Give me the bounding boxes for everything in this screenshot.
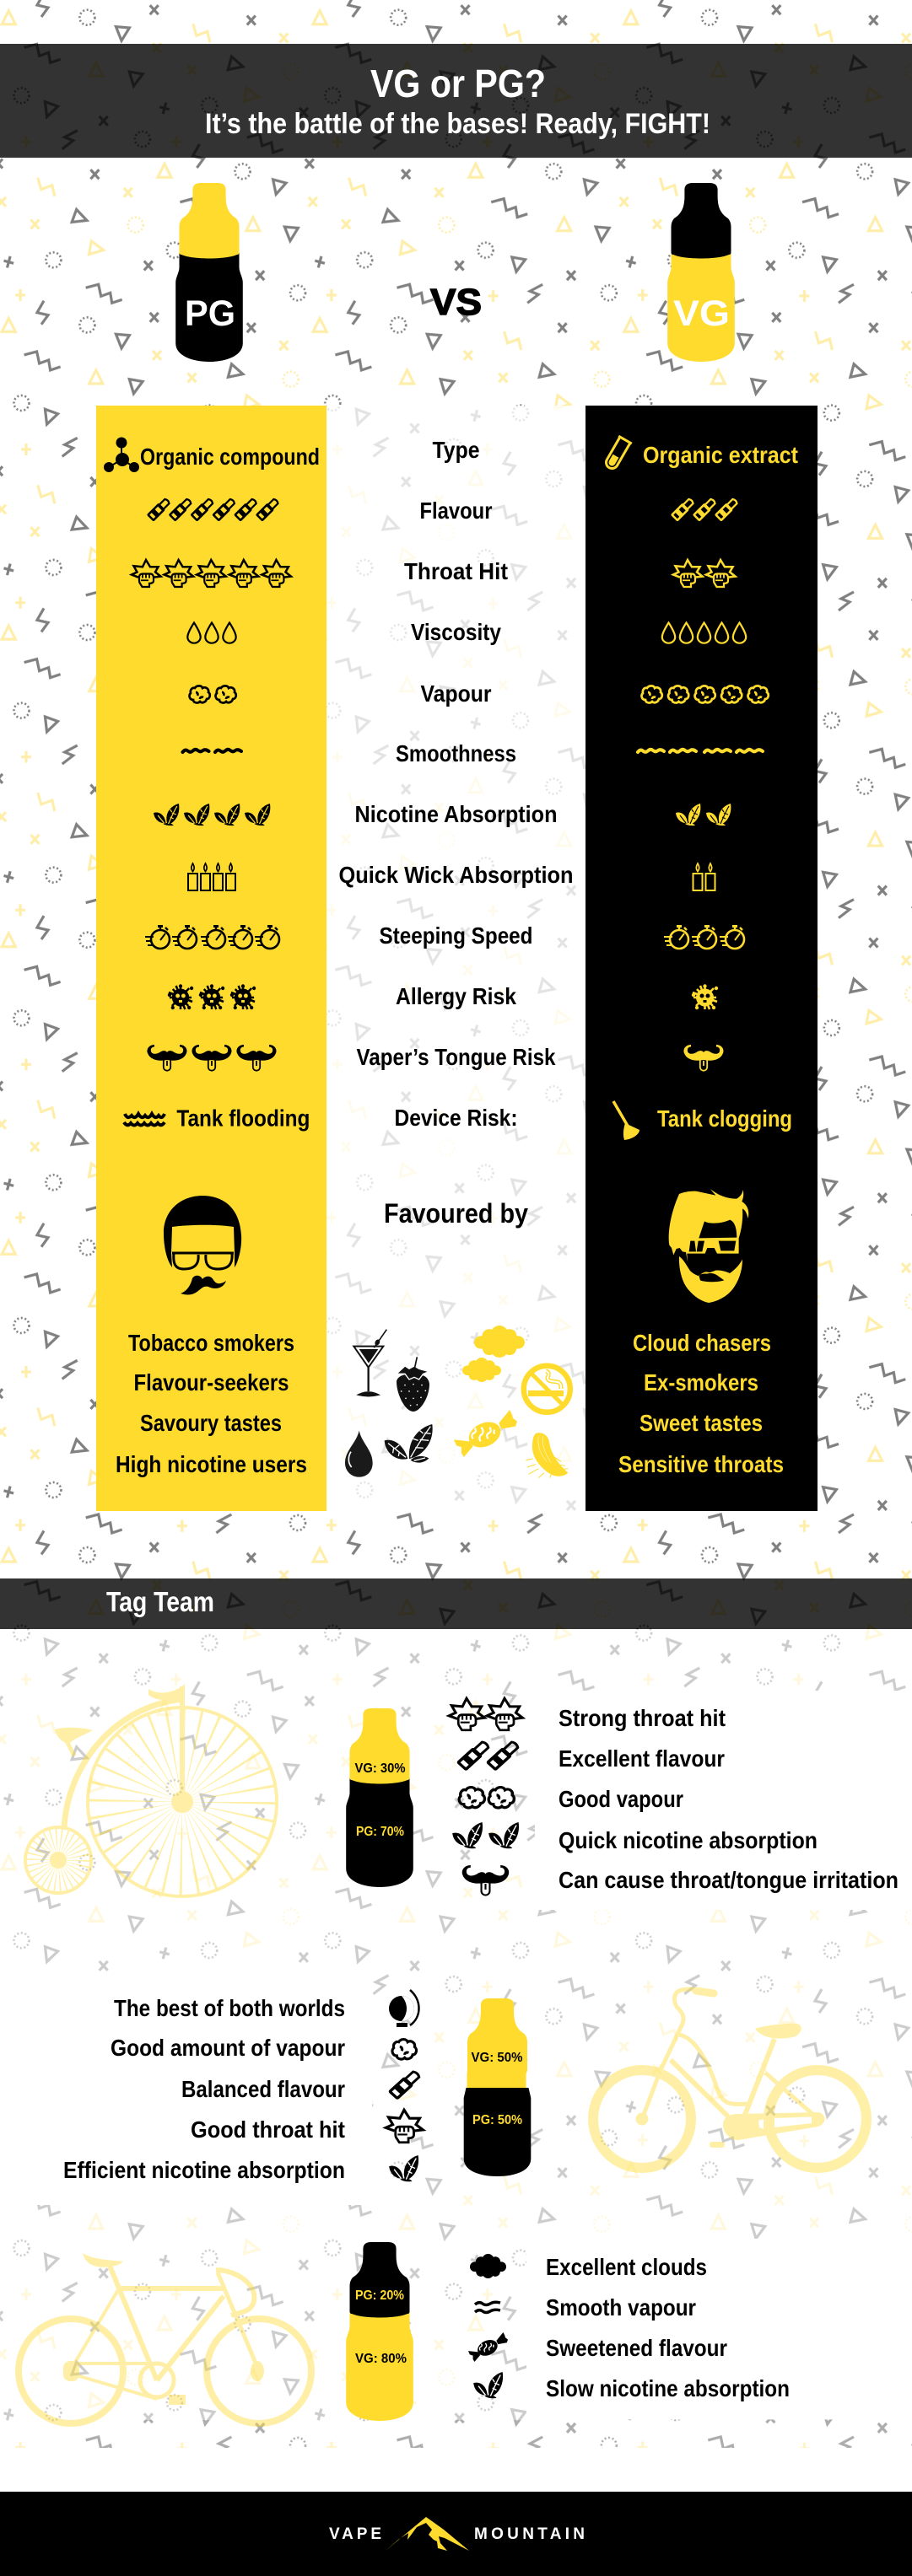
list: tag team 2: Good throat hit bbox=[191, 2116, 345, 2143]
section header: tag team bbox=[0, 1578, 912, 1629]
list: PG users: Savoury tastes bbox=[140, 1410, 282, 1436]
list: PG users: Tobacco smokers bbox=[128, 1330, 294, 1356]
bottle: VG 30 PG 70: VG: 30% bbox=[354, 1761, 406, 1776]
comparison labels: Vaper’s Tongue Risk bbox=[356, 1044, 556, 1070]
list: PG users bbox=[116, 1330, 307, 1477]
allergy icon bbox=[692, 984, 718, 1009]
bottle: VG 50 PG 50: PG: 50% bbox=[472, 2113, 522, 2127]
list: VG users: Ex-smokers bbox=[644, 1369, 758, 1396]
vapour icons bbox=[190, 686, 236, 702]
wick icons bbox=[693, 863, 715, 890]
illustration: penny-farthing bbox=[25, 1684, 277, 1896]
heading: favoured by: Favoured by bbox=[384, 1198, 528, 1229]
icons: tag team 2 bbox=[386, 1990, 423, 2181]
PG bottle bbox=[175, 183, 243, 362]
bottle: PG 20 VG 80: PG: 20% bbox=[355, 2288, 404, 2303]
icon: feather bbox=[526, 1433, 568, 1478]
icons: tag team 1 bbox=[449, 1698, 522, 1895]
icon: VG user face bbox=[669, 1189, 748, 1303]
comparison labels: Throat Hit bbox=[404, 558, 508, 584]
viscosity icons bbox=[187, 622, 236, 643]
list: VG users: Sweet tastes bbox=[639, 1410, 763, 1436]
viscosity icons bbox=[662, 622, 746, 643]
PG bottle: PG bbox=[185, 293, 235, 334]
list: PG users: Flavour-seekers bbox=[133, 1369, 289, 1396]
list: tag team 1: Quick nicotine absorption bbox=[559, 1827, 818, 1853]
comparison labels: Flavour bbox=[420, 497, 493, 524]
steeping icons bbox=[664, 925, 744, 949]
list: tag team 2 bbox=[63, 1995, 345, 2183]
panel: PG column bbox=[96, 406, 326, 1511]
icon: flooding bbox=[124, 1114, 165, 1125]
list: tag team 2: Balanced flavour bbox=[181, 2076, 345, 2102]
panel: VG column bbox=[586, 406, 818, 1511]
flavour icons bbox=[671, 497, 739, 522]
comparison labels: Device Risk: bbox=[395, 1105, 518, 1131]
icon: black leaves bbox=[385, 1424, 433, 1463]
smoothness icons bbox=[638, 750, 763, 752]
comparison labels: Viscosity bbox=[411, 619, 501, 645]
illustration: road bicycle bbox=[19, 2253, 311, 2423]
icon: candy bbox=[454, 1410, 517, 1457]
footer: MOUNTAIN bbox=[474, 2525, 585, 2543]
VG bottle bbox=[667, 183, 735, 362]
device risk text: Tank clogging bbox=[657, 1105, 792, 1132]
bottle: VG 50 PG 50 bbox=[464, 1998, 531, 2176]
icon: strawberry bbox=[397, 1357, 429, 1412]
list: tag team 1: Strong throat hit bbox=[559, 1705, 726, 1731]
nicotine icons bbox=[676, 804, 731, 826]
bottle: PG 20 VG 80: VG: 80% bbox=[355, 2352, 407, 2366]
list: VG users: Sensitive throats bbox=[618, 1451, 784, 1477]
list: PG users: High nicotine users bbox=[116, 1451, 307, 1477]
title: VG or PG? bbox=[370, 62, 546, 105]
type text: Organic extract bbox=[643, 442, 798, 468]
throat hit icons bbox=[132, 560, 291, 587]
PG column contents bbox=[104, 437, 320, 1477]
list: tag team 1 bbox=[559, 1705, 899, 1893]
device risk text: Tank flooding bbox=[176, 1105, 310, 1132]
comparison labels: Nicotine Absorption bbox=[354, 801, 557, 827]
list: tag team 3 bbox=[546, 2254, 790, 2401]
bottle: VG 30 PG 70: PG: 70% bbox=[356, 1825, 404, 1839]
type text: Organic compound bbox=[140, 444, 320, 470]
icon: plunger bbox=[613, 1101, 639, 1140]
list: tag team 3: Excellent clouds bbox=[546, 2254, 707, 2280]
bottle: VG 30 PG 70 bbox=[346, 1708, 413, 1887]
list: VG users bbox=[618, 1330, 784, 1477]
VG bottle: VG bbox=[673, 293, 730, 334]
vapour icons bbox=[642, 686, 769, 702]
icon: yellow cloud small bbox=[462, 1358, 501, 1382]
list: tag team 2: Good amount of vapour bbox=[111, 2035, 345, 2061]
icon: molecule bbox=[104, 437, 139, 472]
VS label: VS bbox=[430, 282, 482, 323]
footer bbox=[0, 2492, 912, 2576]
comparison labels: Smoothness bbox=[396, 740, 516, 766]
bottle: PG 20 VG 80 bbox=[346, 2242, 413, 2421]
list: tag team 2: Efficient nicotine absorption bbox=[63, 2157, 345, 2183]
allergy icons bbox=[168, 984, 256, 1009]
icons: tag team 3 bbox=[468, 2254, 508, 2398]
comparison labels: Allergy Risk bbox=[396, 983, 516, 1009]
icon: PG user face bbox=[164, 1196, 241, 1295]
comparison labels: Steeping Speed bbox=[380, 922, 533, 949]
tongue icons bbox=[147, 1045, 277, 1071]
subtitle: It’s the battle of the bases! Ready, FIGHT! bbox=[205, 108, 710, 140]
icon: martini bbox=[353, 1330, 386, 1396]
comparison labels: Quick Wick Absorption bbox=[339, 862, 574, 888]
list: tag team 2: The best of both worlds bbox=[114, 1995, 345, 2021]
steeping icons bbox=[145, 925, 279, 949]
comparison labels: Type bbox=[432, 437, 479, 463]
smoothness icons bbox=[182, 750, 241, 752]
icon: yellow cloud large bbox=[474, 1326, 525, 1358]
nicotine icons bbox=[154, 804, 270, 826]
list: VG users: Cloud chasers bbox=[633, 1330, 771, 1356]
footer: VAPE bbox=[329, 2525, 381, 2543]
list: tag team 3: Smooth vapour bbox=[546, 2294, 696, 2321]
icon: black drop bbox=[345, 1431, 373, 1477]
illustration: city bicycle bbox=[593, 1989, 866, 2168]
header band bbox=[0, 44, 912, 158]
list: tag team 3: Sweetened flavour bbox=[546, 2335, 727, 2361]
list: tag team 1: Good vapour bbox=[559, 1786, 683, 1812]
list: tag team 3: Slow nicotine absorption bbox=[546, 2375, 790, 2401]
section header: tag team: Tag Team bbox=[106, 1586, 214, 1617]
VG column contents bbox=[602, 436, 798, 1477]
icon: no smoking bbox=[524, 1366, 570, 1412]
comparison labels bbox=[339, 437, 574, 1131]
bottle: VG 50 PG 50: VG: 50% bbox=[471, 2051, 523, 2065]
tongue icon bbox=[683, 1045, 724, 1071]
flavour icons bbox=[147, 497, 280, 522]
throat hit icons bbox=[673, 560, 736, 587]
comparison labels: Vapour bbox=[420, 680, 492, 707]
wick icons bbox=[188, 863, 235, 890]
icon: mountain logo bbox=[386, 2517, 469, 2551]
icon: test tube bbox=[602, 436, 632, 471]
list: tag team 1: Excellent flavour bbox=[559, 1745, 725, 1772]
